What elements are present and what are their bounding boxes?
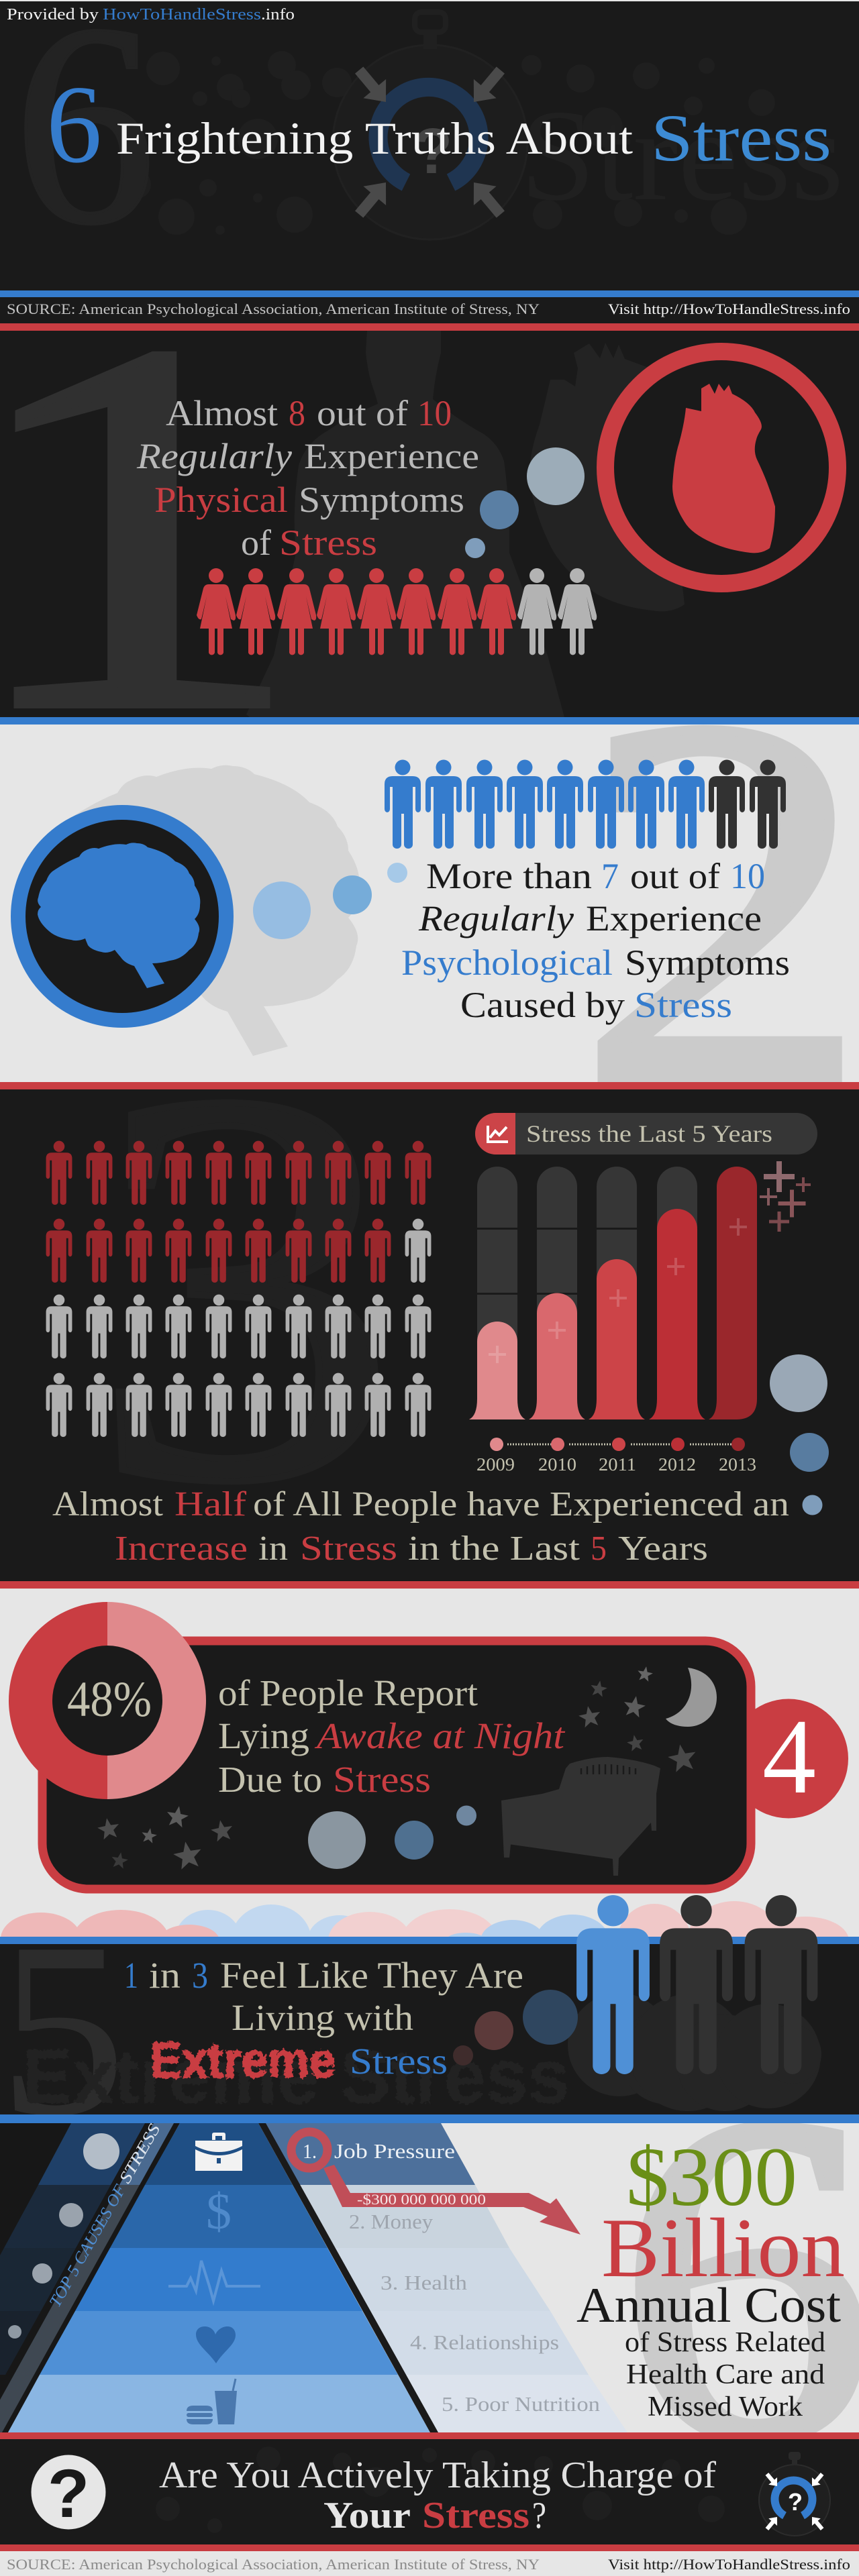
- chart title pill: Stress the Last 5 Years: [526, 1120, 772, 1147]
- magnifier arrow with amount: -$300 000 000 000: [357, 2191, 486, 2208]
- headline: out of: [630, 856, 720, 896]
- headline: 7: [601, 856, 619, 896]
- stars: [96, 1665, 699, 1870]
- pictogram: people grid: [46, 1141, 431, 1437]
- headline: Psychological: [401, 943, 613, 983]
- question text: Are You Actively Taking Charge of: [159, 2455, 716, 2496]
- headline: Living with: [232, 1997, 413, 2038]
- headline: Caused by: [460, 985, 625, 1025]
- ghost words extreme stress: Extreme Stress: [22, 2034, 570, 2120]
- headline: in: [258, 1529, 288, 1568]
- provided by line: [7, 6, 295, 23]
- ghost brain: [34, 765, 360, 1056]
- provided by line: .info: [261, 6, 295, 23]
- background bubbles: [123, 51, 775, 235]
- headline: out of: [317, 393, 408, 433]
- icon: logo stopwatch head: [759, 2452, 830, 2536]
- icon: logo stopwatch head: ?: [788, 2488, 803, 2516]
- panel: bottom source strip: SOURCE: American Psychological Association, American Institute of Stress, NY: [7, 2556, 540, 2573]
- body copy: Due to: [218, 1759, 322, 1800]
- headline: [401, 856, 790, 1025]
- pictogram: ten women: [197, 568, 597, 655]
- headline: 8: [289, 393, 305, 433]
- headline: Stress: [634, 985, 732, 1025]
- body copy: of People Report: [218, 1672, 478, 1713]
- headline: More than: [426, 856, 592, 896]
- headline: [136, 393, 479, 563]
- icon: heart in ring: [605, 352, 838, 584]
- headline: Increase: [115, 1529, 248, 1568]
- donut chart 48 percent: 48%: [67, 1672, 152, 1727]
- panel: call to action: [0, 2432, 859, 2536]
- headline: Regularly: [136, 436, 292, 476]
- title text: 6: [46, 62, 102, 186]
- chart title pill: [475, 1113, 817, 1155]
- headline: Physical: [154, 480, 288, 520]
- cause labels: 3. Health: [381, 2271, 468, 2294]
- background bubbles: [156, 2447, 725, 2533]
- icon: food and drink: [187, 2379, 237, 2424]
- panel: truth 3 increase over 5 years: [0, 1082, 859, 1560]
- headline: of All People have Experienced an: [253, 1485, 789, 1523]
- cost headline: $300: [626, 2131, 797, 2224]
- headline: 3: [192, 1955, 208, 1996]
- headline: Experience: [304, 436, 479, 476]
- headline: in: [149, 1955, 181, 1996]
- pyramid: [8, 2123, 438, 2432]
- body copy: Awake at Night: [314, 1715, 566, 1756]
- headline: 10: [417, 393, 452, 433]
- cause labels: 2. Money: [349, 2210, 434, 2233]
- side stripe with caption: STRESS: [116, 2121, 164, 2186]
- cost headline: Health Care and: [626, 2359, 825, 2390]
- panel: top source strip: [0, 290, 859, 331]
- bubbles: [465, 447, 585, 558]
- headline: [52, 1485, 789, 1568]
- timeline with years: [476, 1438, 756, 1474]
- title text: Stress: [651, 101, 831, 175]
- icon: question circle: ?: [48, 2455, 89, 2532]
- ghost body silhouette: [246, 331, 685, 717]
- timeline with years: 2010: [538, 1454, 576, 1474]
- question text: ?: [532, 2495, 546, 2536]
- provided by line: Provided by: [7, 6, 99, 23]
- headline: Stress: [300, 1529, 397, 1568]
- headline: Symptoms: [299, 480, 464, 520]
- clouds: [1, 1901, 848, 1937]
- icon: heart: [196, 2326, 236, 2363]
- cost headline: Annual Cost: [576, 2278, 841, 2333]
- ghost numeral 5: 5: [0, 1892, 126, 2167]
- question text: Your: [323, 2495, 411, 2536]
- body copy: [218, 1672, 566, 1800]
- headline: Stress: [279, 523, 377, 563]
- side stripe with caption: TOP 5 CAUSES OF: [46, 2182, 130, 2310]
- ghost numeral 2: 2: [577, 608, 859, 1195]
- badge: number 4: 4: [762, 1697, 816, 1816]
- icon: heartbeat: [168, 2261, 260, 2301]
- headline: Experience: [586, 898, 762, 938]
- headline: 1: [124, 1955, 138, 1996]
- bar chart: stress by year: [469, 1167, 757, 1419]
- headline: Regularly: [418, 898, 574, 938]
- cost headline: Missed Work: [648, 2392, 803, 2422]
- headline: 5: [591, 1529, 607, 1568]
- panel: truth 6 causes and cost: [0, 2123, 859, 2432]
- cost headline: Billion: [601, 2202, 845, 2295]
- panel: top source strip: SOURCE: American Psychological Association, American Institute of Stress, NY: [7, 301, 540, 317]
- bubbles: [253, 863, 407, 939]
- headline: Half: [174, 1485, 247, 1523]
- panel: title header: [0, 0, 859, 284]
- ghost numeral 3: 3: [90, 973, 399, 1598]
- cause labels: 5. Poor Nutrition: [442, 2392, 601, 2416]
- headline: [124, 1955, 523, 2088]
- panel: bottom source strip: [0, 2544, 859, 2576]
- icon: bed: [501, 1757, 660, 1876]
- ghost numeral 6: 6: [617, 2019, 859, 2538]
- timeline with years: 2013: [719, 1454, 756, 1474]
- cost headline: [576, 2131, 845, 2422]
- icon: dim stopwatch with head: ?: [413, 115, 452, 187]
- headline: 10: [730, 856, 765, 896]
- pictogram: ten men: [385, 759, 786, 849]
- cause labels: Job Pressure: [334, 2139, 455, 2163]
- bubbles: [453, 1990, 578, 2065]
- body copy: Lying: [218, 1715, 309, 1756]
- icon: moon: [666, 1668, 717, 1727]
- headline: in the Last: [408, 1529, 580, 1568]
- left dark area: [0, 2123, 180, 2432]
- icon: question circle: [31, 2455, 106, 2532]
- timeline with years: 2009: [476, 1454, 515, 1474]
- timeline with years: 2011: [599, 1454, 636, 1474]
- cause labels: 4. Relationships: [410, 2330, 559, 2354]
- cause labels: 1.: [303, 2139, 317, 2163]
- night panel: [42, 1641, 751, 1889]
- question text: [159, 2455, 716, 2536]
- icon: brain in ring: [18, 812, 226, 1020]
- badge: number 4: [729, 1697, 848, 1818]
- panel: truth 1 physical symptoms: [0, 234, 838, 819]
- title text: Frightening Truths About: [116, 113, 633, 164]
- side stripe with caption: [0, 2121, 174, 2432]
- magnifier arrow with amount: [291, 2132, 580, 2235]
- people figures: [576, 1895, 817, 2074]
- headline: Years: [618, 1529, 708, 1568]
- timeline with years: 2012: [658, 1454, 696, 1474]
- headline: Almost: [52, 1485, 164, 1523]
- headline: Extreme: [150, 2032, 336, 2088]
- panel: truth 4 awake at night: [0, 1581, 859, 1937]
- cause labels: [303, 2139, 601, 2416]
- question text: Stress: [422, 2495, 529, 2536]
- ghost cloud: [568, 1993, 821, 2111]
- plus marks on bars: [489, 1218, 747, 1363]
- headline: Symptoms: [625, 943, 790, 983]
- panel: bottom source strip: Visit http://HowToHandleStress.info: [608, 2556, 850, 2573]
- icon: dim stopwatch with head: [333, 12, 527, 239]
- panel: top source strip: Visit http://HowToHandleStress.info: [608, 301, 850, 317]
- title text: [46, 62, 831, 186]
- panel: truth 2 psychological symptoms: [0, 717, 859, 1082]
- icon: briefcase: [195, 2133, 242, 2171]
- ghost word Stress: Stress: [520, 83, 844, 228]
- right stair bands: [262, 2123, 627, 2432]
- icon: dollar: $: [206, 2184, 232, 2240]
- donut chart 48 percent: [9, 1602, 206, 1799]
- cost headline: of Stress Related: [625, 2327, 825, 2358]
- decorative plus cluster: [760, 1161, 811, 1232]
- bubbles: [308, 1806, 476, 1869]
- headline: of: [241, 523, 271, 563]
- headline: Feel Like They Are: [220, 1955, 523, 1996]
- headline: Stress: [350, 2041, 448, 2082]
- provided by line: HowToHandleStress: [103, 6, 261, 23]
- body copy: Stress: [333, 1759, 431, 1800]
- headline: Almost: [166, 393, 278, 433]
- bubbles: [770, 1354, 829, 1515]
- panel: truth 5 extreme stress: [0, 1892, 859, 2167]
